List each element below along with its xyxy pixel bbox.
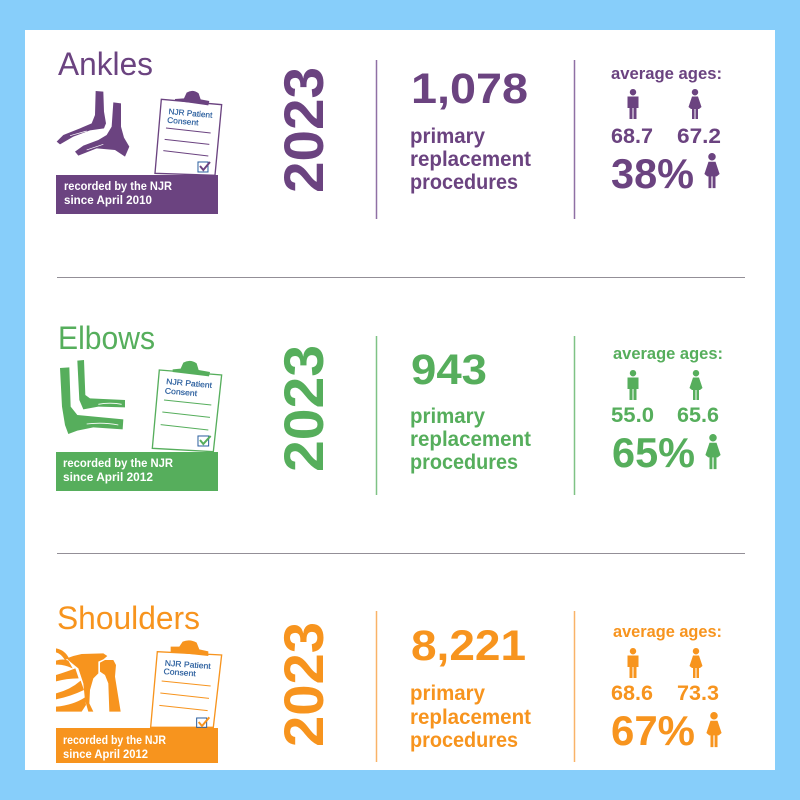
stat: procedures: replacement bbox=[410, 428, 531, 451]
icon: elbow bones bbox=[60, 360, 125, 434]
icon: consent clipboard: Consent bbox=[164, 386, 198, 398]
stat: procedures: 943 bbox=[411, 346, 487, 394]
icon: woman large bbox=[705, 434, 721, 469]
icon: woman bbox=[690, 648, 702, 678]
stat: average ages: average ages: bbox=[613, 344, 723, 363]
stat: average ages: 65% bbox=[612, 429, 695, 476]
stat: procedures: 1,078 bbox=[411, 65, 528, 113]
stat: procedures: 8,221 bbox=[411, 622, 526, 670]
stat: average ages: 73.3 bbox=[677, 682, 719, 705]
icon: consent clipboard: NJR Patient bbox=[165, 659, 212, 671]
icon: woman large bbox=[706, 712, 722, 747]
banner: recorded by the NJR bbox=[56, 175, 218, 214]
stat: procedures bbox=[410, 346, 531, 474]
banner: recorded by the NJR: since April 2010 bbox=[64, 193, 152, 207]
icon: man bbox=[628, 89, 638, 119]
icon: ankle and foot bones bbox=[57, 91, 129, 157]
icon: shoulder bones bbox=[56, 648, 121, 712]
stat: procedures: procedures bbox=[410, 451, 518, 474]
banner: recorded by the NJR: recorded by the NJR bbox=[63, 733, 166, 747]
stat: average ages: 68.7 bbox=[611, 125, 653, 148]
year: 2023: 2023 bbox=[272, 345, 335, 472]
stat: average ages: average ages: bbox=[611, 64, 722, 83]
icon: consent clipboard bbox=[151, 640, 222, 727]
stat: average ages bbox=[611, 622, 722, 754]
icon: woman bbox=[690, 370, 702, 400]
stat: average ages: 38% bbox=[611, 150, 694, 197]
icon: consent clipboard: NJR Patient bbox=[166, 377, 213, 390]
stat: average ages: 65.6 bbox=[677, 404, 719, 427]
stat: procedures: primary bbox=[410, 405, 485, 428]
banner: recorded by the NJR: since April 2012 bbox=[63, 747, 148, 761]
stat: average ages: 67% bbox=[611, 707, 695, 754]
year: 2023: 2023 bbox=[272, 67, 335, 193]
stat: procedures: primary bbox=[410, 682, 485, 705]
heading: Ankles: Ankles bbox=[58, 46, 153, 82]
icon: woman bbox=[688, 89, 702, 119]
panel: shoulders bbox=[56, 600, 722, 763]
panel: elbows bbox=[56, 320, 723, 495]
heading: Elbows: Elbows bbox=[58, 320, 155, 356]
icon: consent clipboard: NJR Patient bbox=[168, 107, 214, 120]
banner: recorded by the NJR bbox=[56, 728, 218, 763]
icon: consent clipboard: Consent bbox=[167, 116, 200, 127]
banner: recorded by the NJR: since April 2012 bbox=[63, 470, 153, 484]
stat: procedures: procedures bbox=[410, 729, 518, 752]
stat: average ages bbox=[611, 344, 723, 476]
icon: consent clipboard: Consent bbox=[163, 667, 197, 678]
heading: Shoulders: Shoulders bbox=[57, 600, 200, 636]
panel: ankles bbox=[56, 46, 722, 219]
stat: average ages: 68.6 bbox=[611, 682, 653, 705]
icon: man bbox=[628, 648, 638, 678]
icon: consent clipboard bbox=[152, 361, 222, 452]
banner: recorded by the NJR: recorded by the NJR bbox=[64, 179, 172, 193]
stat: procedures: primary bbox=[410, 125, 485, 148]
banner: recorded by the NJR: recorded by the NJR bbox=[63, 456, 173, 470]
banner: recorded by the NJR bbox=[56, 452, 218, 491]
icon: consent clipboard bbox=[155, 91, 222, 175]
stat: procedures: replacement bbox=[410, 148, 531, 171]
stat: procedures: replacement bbox=[410, 706, 531, 729]
stat: average ages: 55.0 bbox=[611, 404, 654, 427]
stat: average ages: 67.2 bbox=[677, 125, 721, 148]
stat: average ages bbox=[611, 64, 722, 197]
icon: man bbox=[628, 370, 638, 400]
stat: procedures bbox=[410, 65, 531, 194]
year: 2023: 2023 bbox=[272, 622, 335, 747]
icon: woman large bbox=[704, 153, 720, 188]
stat: procedures: procedures bbox=[410, 171, 518, 194]
stat: average ages: average ages: bbox=[613, 622, 722, 641]
stat: procedures bbox=[410, 622, 531, 752]
